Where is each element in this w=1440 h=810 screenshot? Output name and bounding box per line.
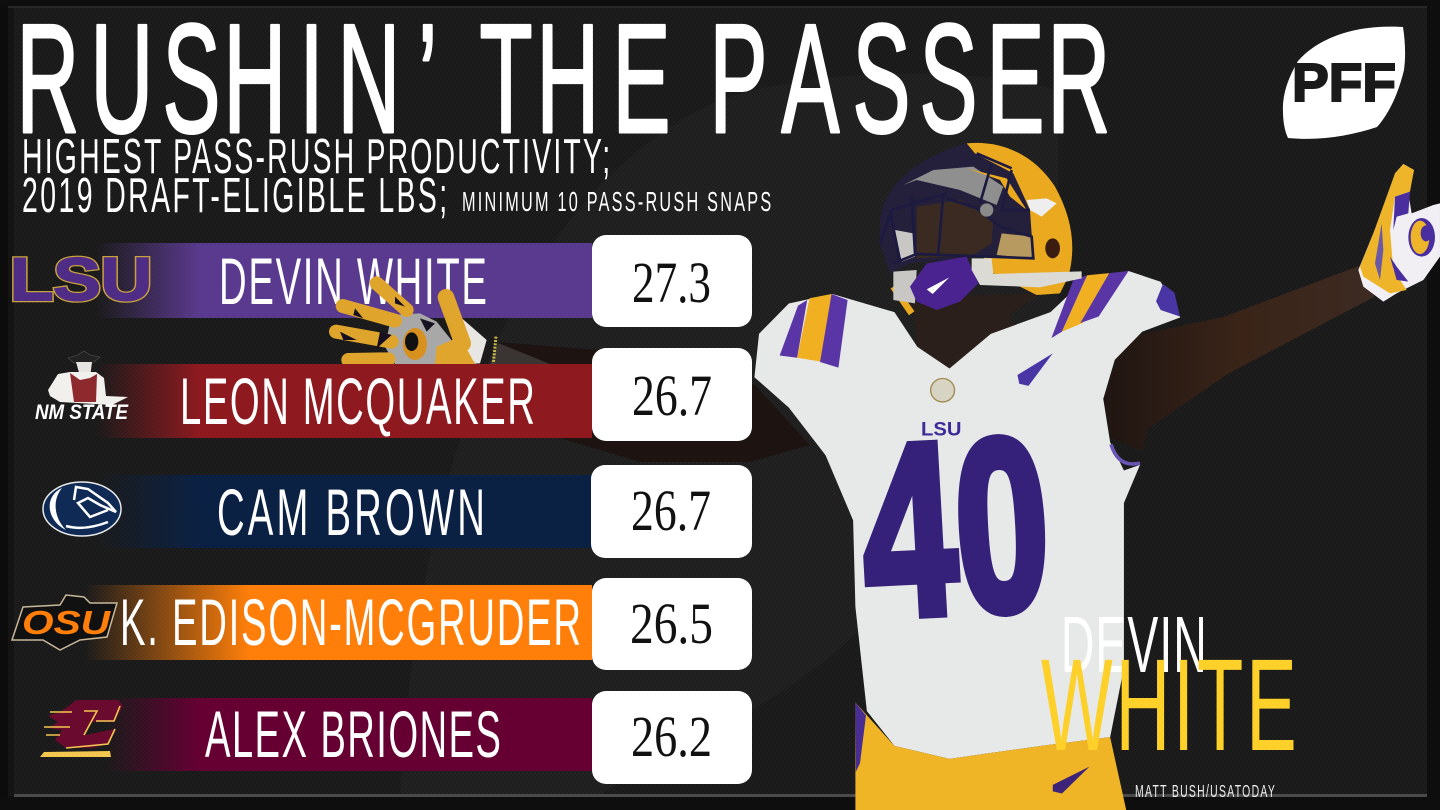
gold brow	[967, 168, 1027, 210]
lower stripe	[1390, 257, 1408, 282]
cuff	[460, 317, 487, 363]
face	[917, 200, 993, 258]
mascot hat	[68, 351, 100, 363]
name: DEVIN WHITE	[219, 245, 487, 319]
helmet	[880, 143, 1082, 330]
C mark	[48, 700, 123, 748]
SEC patch	[931, 379, 955, 402]
gold palm patch	[435, 337, 475, 364]
jersey swoosh	[1017, 353, 1053, 386]
minimum snaps note: MINIMUM 10 PASS-RUSH SNAPS	[462, 185, 771, 217]
mascot body	[48, 372, 128, 405]
jaw pad	[997, 233, 1033, 258]
left shoulder stripes	[780, 294, 848, 368]
gold areas	[1360, 164, 1414, 293]
lower gold trim	[893, 287, 912, 313]
pants stripe	[855, 702, 866, 772]
logo: Penn State	[43, 482, 121, 536]
value box 1	[592, 235, 752, 327]
name: CAM BROWN	[217, 476, 485, 550]
neck	[913, 303, 1014, 369]
purple fill: LSU	[10, 246, 152, 313]
mascot head	[76, 362, 92, 378]
wrist beads	[493, 337, 496, 363]
row 4 bar: K. Edison-McGruder	[85, 585, 592, 660]
palm logo center	[1421, 225, 1431, 241]
logo: NM State	[35, 351, 129, 424]
jersey number 40: 40	[855, 387, 1056, 669]
tiger eye	[403, 328, 427, 360]
value: 26.5	[630, 591, 713, 656]
pants swoosh	[1053, 767, 1089, 794]
thumb	[446, 297, 463, 343]
value: 26.2	[631, 704, 712, 769]
logo wordmark: PFF	[1292, 53, 1396, 113]
logo: LSU	[10, 246, 152, 313]
palm logo gold	[1411, 221, 1429, 254]
row 2 bar: Leon McQuaker	[95, 364, 592, 439]
mascot vest	[70, 373, 97, 402]
sleeve trim	[1111, 444, 1140, 464]
photo credit: MATT BUSH/USATODAY	[1135, 782, 1275, 802]
purple thumb patch	[1393, 192, 1410, 230]
cheek highlight	[895, 230, 915, 262]
sleeve number	[1156, 284, 1180, 316]
LSU chest text: LSU	[921, 419, 961, 440]
neck shadow	[917, 293, 1040, 330]
last name: WHITE	[1041, 631, 1297, 778]
player glove	[336, 283, 496, 364]
value: 26.7	[632, 363, 712, 428]
name: LEON MCQUAKER	[180, 365, 535, 439]
mouth guard swoosh	[927, 277, 949, 294]
side stripe	[1375, 223, 1383, 280]
value: 27.3	[632, 250, 711, 315]
chin clip	[980, 203, 993, 217]
logo: Oklahoma State	[12, 595, 117, 650]
row 1 bar: Devin White	[95, 243, 592, 319]
ear hole	[1045, 238, 1060, 258]
lion left arc	[50, 488, 66, 530]
glove base	[1358, 164, 1440, 302]
scuffed front shell	[880, 143, 1033, 273]
value box 4	[592, 578, 752, 670]
palm logo ring	[1408, 218, 1435, 257]
stripes	[340, 297, 435, 348]
wrist	[490, 343, 550, 364]
logo ball	[1283, 27, 1405, 139]
visor	[903, 167, 1003, 205]
name: K. EDISON-MCGRUDER	[120, 586, 581, 660]
side pad	[893, 270, 917, 303]
value box 3	[591, 465, 752, 558]
name: ALEX BRIONES	[205, 698, 501, 772]
oval	[43, 482, 121, 536]
value box 5	[592, 691, 752, 784]
value box 2	[592, 348, 752, 441]
value: 26.7	[631, 478, 711, 543]
gold accents	[44, 706, 120, 748]
badge	[12, 595, 117, 650]
facemask	[880, 153, 1033, 263]
gold shell	[967, 143, 1072, 295]
player name label	[1041, 600, 1297, 778]
row 3 bar: Cam Brown	[95, 475, 592, 550]
logo: Central Michigan	[40, 700, 123, 757]
lion head	[66, 487, 116, 528]
subtitle	[22, 130, 771, 223]
subtitle line two: 2019 DRAFT-ELIGIBLE LBS;	[22, 169, 447, 223]
wordmark: OSU	[22, 604, 111, 641]
side strap white	[1027, 198, 1057, 217]
PFF logo	[1283, 27, 1405, 139]
right glove	[1358, 164, 1440, 302]
jersey	[754, 271, 1180, 759]
row 5 bar: Alex Briones	[105, 698, 592, 772]
chin strap	[972, 258, 1082, 287]
right shoulder stripes	[1051, 271, 1129, 338]
wordmark: NM STATE	[35, 401, 129, 424]
pants	[855, 702, 1126, 810]
right arm	[1103, 264, 1374, 451]
player figure	[754, 264, 1374, 810]
palm	[385, 313, 477, 364]
mouth guard	[910, 257, 978, 310]
player left arm	[490, 342, 810, 462]
base stripe	[40, 751, 111, 757]
subtitle line one: HIGHEST PASS-RUSH PRODUCTIVITY;	[22, 130, 610, 184]
fingers	[336, 283, 407, 360]
first name: DEVIN	[1061, 600, 1207, 689]
gold outline: LSU	[10, 246, 152, 313]
